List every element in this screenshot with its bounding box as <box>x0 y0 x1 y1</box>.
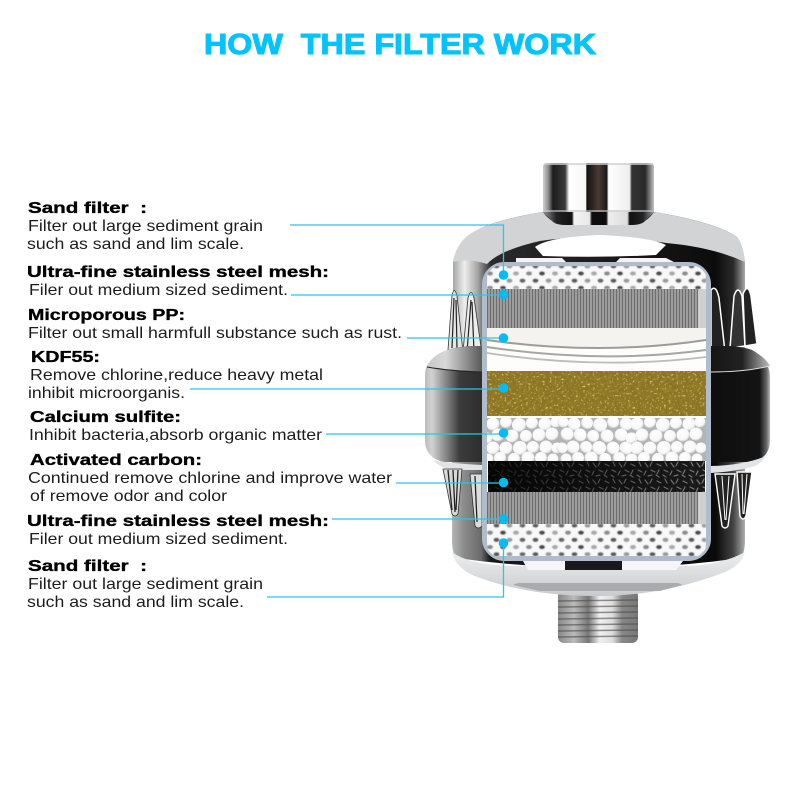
callout line: calcium sulfite <box>326 428 508 438</box>
text block: ultra-fine mesh top: Ultra-fine stainless steel mesh: <box>27 264 329 281</box>
text block: ultra-fine mesh top: Filer out medium sized sediment. <box>29 282 288 299</box>
text block: calcium sulfite: Inhibit bacteria,absorb organic matter <box>29 427 323 444</box>
window reflection <box>535 235 666 257</box>
layer: KDF55 granules <box>487 371 706 416</box>
text block: sand filter top: Sand filter : <box>28 200 147 217</box>
title: HOW THE FILTER WORK <box>204 29 596 61</box>
cutaway window frame <box>484 264 708 558</box>
filter product illustration <box>425 163 770 643</box>
layer: bottom sand filter perforated plate <box>487 524 706 556</box>
text block: sand filter bottom: such as sand and lim scale. <box>27 594 244 611</box>
silver ledge under band <box>433 456 766 473</box>
text block: microporous PP: Filter out small harmfull substance such as rust. <box>28 325 402 342</box>
callout line: bottom sand filter <box>267 538 508 597</box>
layer: calcium sulfite balls <box>487 418 706 461</box>
text block: sand filter bottom <box>27 558 263 611</box>
text block: activated carbon: Activated carbon: <box>30 452 202 469</box>
text block: KDF55: KDF55: <box>31 349 100 366</box>
layer: lower steel mesh <box>487 492 706 524</box>
callout line: steel mesh <box>291 290 508 299</box>
text block: ultra-fine mesh bottom <box>27 513 329 548</box>
lower housing <box>452 462 745 568</box>
layer: top sand filter perforated plate <box>487 266 706 289</box>
text block: ultra-fine mesh bottom: Ultra-fine stainless steel mesh: <box>27 513 329 530</box>
text block: ultra-fine mesh bottom: Filer out medium sized sediment. <box>29 531 288 548</box>
text block: KDF55: Remove chlorine,reduce heavy metal <box>30 367 323 384</box>
text block: activated carbon <box>28 452 393 505</box>
layer: activated carbon <box>488 461 705 492</box>
layer: ultra-fine steel mesh <box>487 289 706 328</box>
text block: sand filter bottom: Filter out large sediment grain <box>28 576 263 593</box>
callout line: microporous PP <box>407 333 508 343</box>
threaded outlet <box>558 590 638 643</box>
upper fins <box>448 288 757 354</box>
callout line: activated carbon <box>396 478 508 487</box>
small reflections <box>516 258 674 262</box>
callout line: top sand filter <box>290 225 508 280</box>
upper housing <box>453 212 745 352</box>
text block: sand filter bottom: Sand filter : <box>28 558 147 575</box>
text block: calcium sulfite: Calcium sulfite: <box>30 409 181 426</box>
text block: activated carbon: Continued remove chlorine and improve water <box>28 470 393 487</box>
text block: sand filter top: Filter out large sediment grain <box>28 218 263 235</box>
text block: microporous PP <box>28 307 402 342</box>
middle band <box>425 346 770 462</box>
callout line: KDF55 <box>190 383 508 393</box>
silver bottom bowl <box>452 552 745 596</box>
filter layers <box>482 266 706 556</box>
lower fins <box>443 469 752 528</box>
text block: KDF55: inhibit microorganis. <box>28 385 185 402</box>
leader lines and dots <box>190 225 508 597</box>
layer: microporous PP <box>486 328 706 364</box>
text block: activated carbon: of remove odor and color <box>30 488 228 505</box>
text block: ultra-fine mesh top <box>27 264 329 299</box>
top connector cap <box>543 163 654 225</box>
shoulder highlight <box>453 212 745 264</box>
text block: sand filter top <box>27 200 263 253</box>
callout line: lower steel mesh <box>332 514 508 524</box>
text block: calcium sulfite <box>29 409 323 444</box>
text block: microporous PP: Microporous PP: <box>28 307 185 324</box>
text block: KDF55 <box>28 349 323 402</box>
text block: sand filter top: such as sand and lim scale. <box>27 236 244 253</box>
